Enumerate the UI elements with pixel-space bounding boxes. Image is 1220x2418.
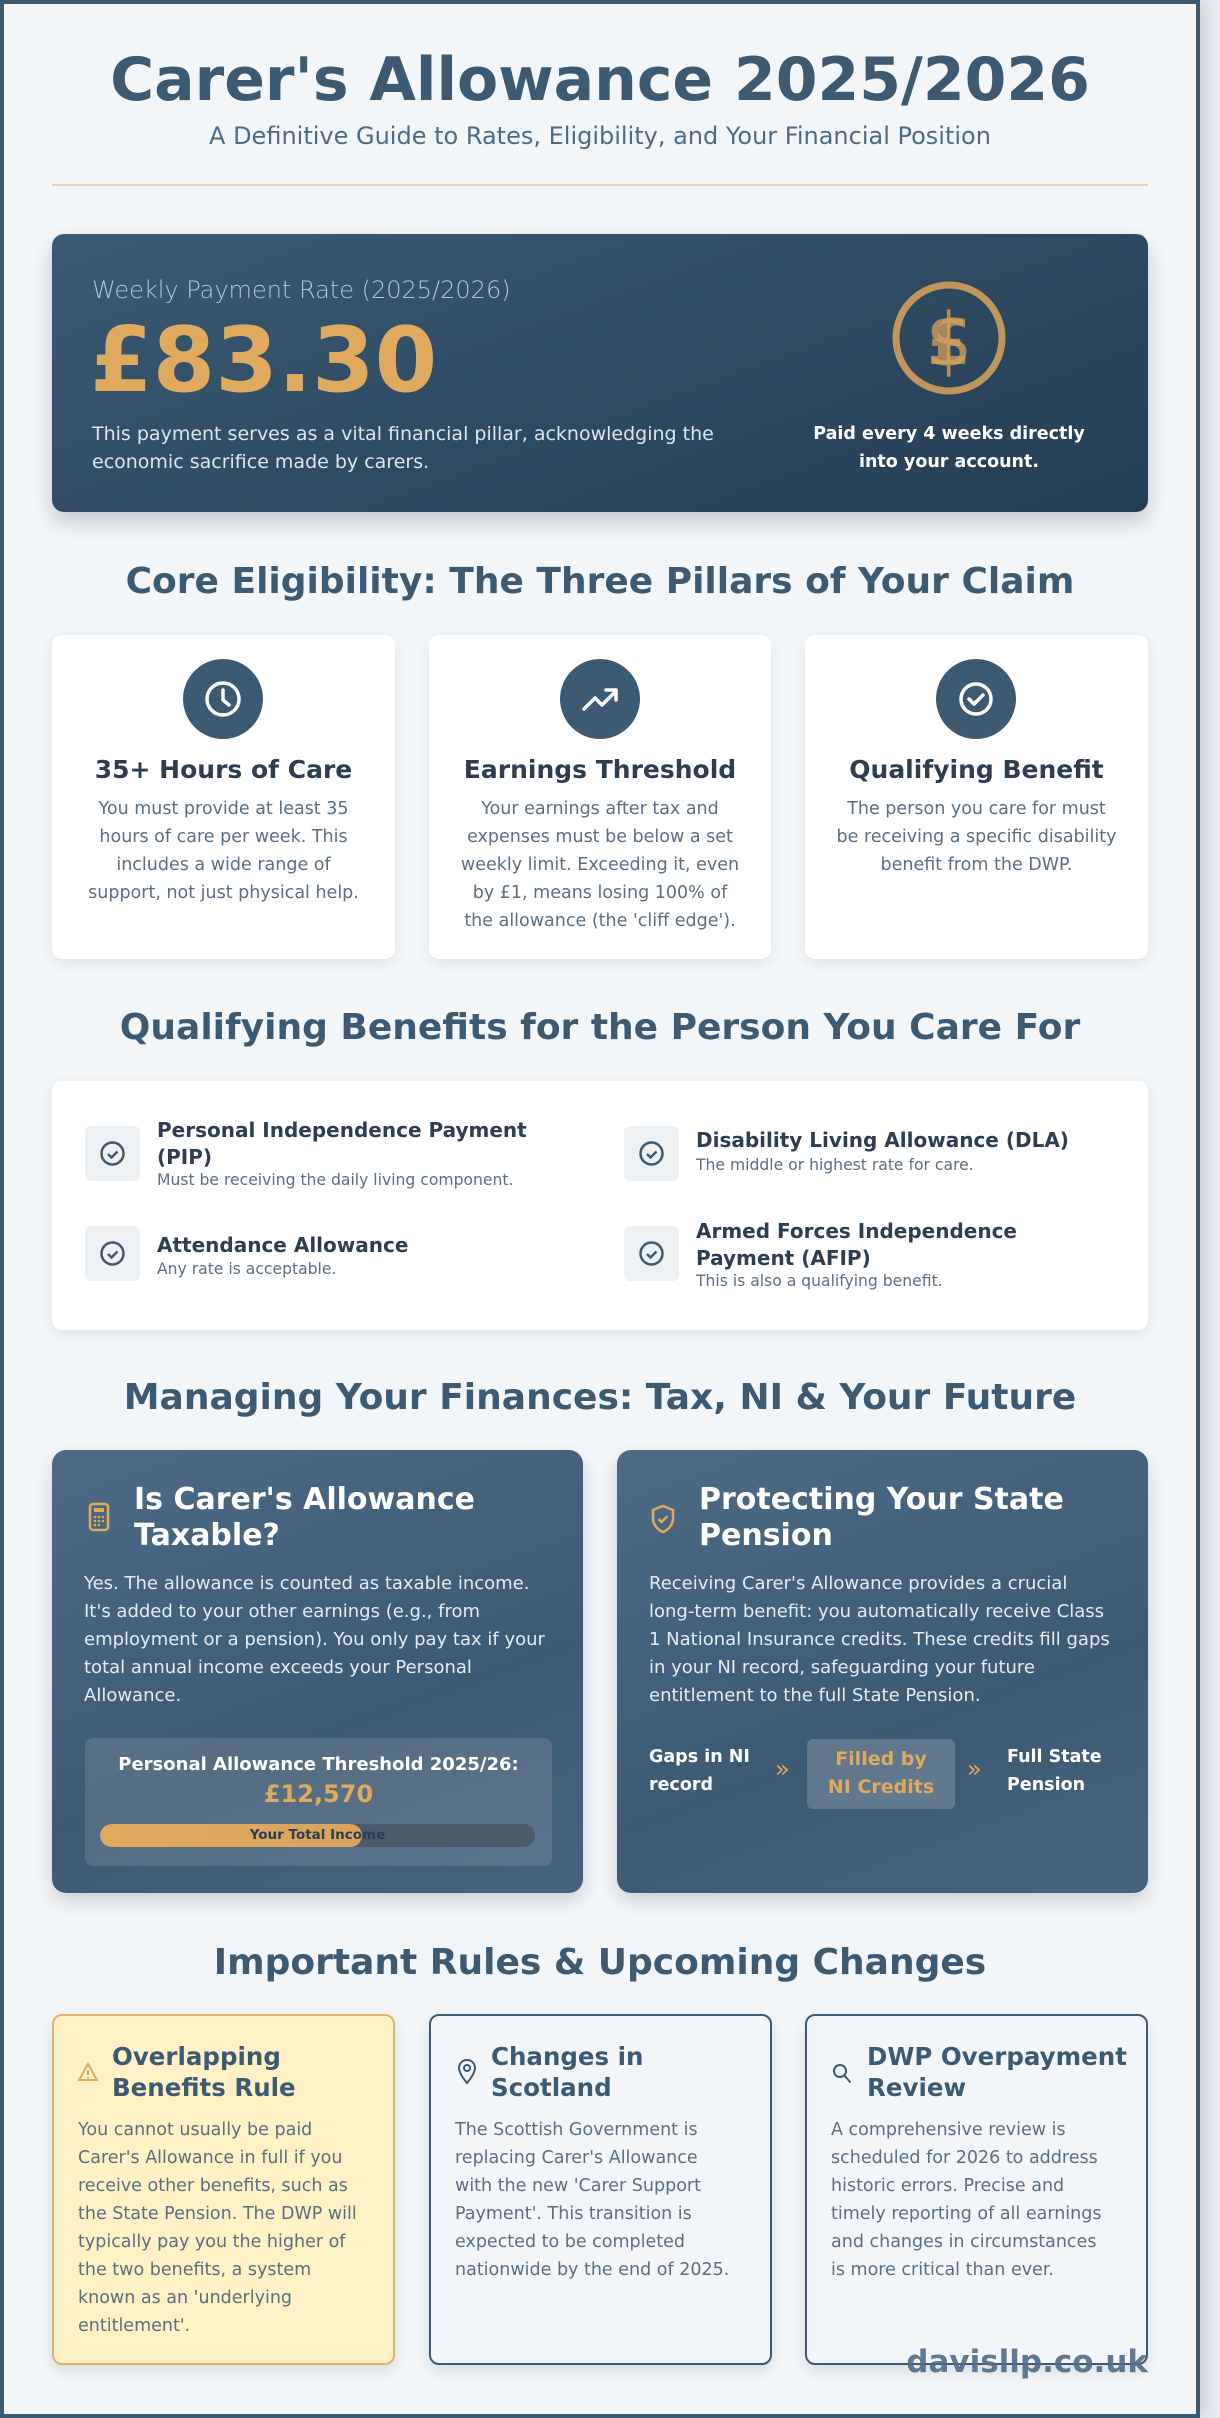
item: AFIP: Armed Forces Independence Payment (AFIP): [696, 1219, 1017, 1270]
subtitle: A Definitive Guide to Rates, Eligibility, and Your Financial Position: [209, 122, 991, 150]
item: Attendance Allowance: Attendance Allowance: [157, 1233, 408, 1257]
threshold box with bar: £12,570: [264, 1780, 373, 1808]
payment note: Paid every 4 weeks directly into your account.: [813, 424, 1085, 472]
card: hours of care: [52, 635, 395, 959]
icon: warning: [78, 2062, 98, 2081]
card: scotland: [429, 2014, 772, 2365]
title: Carer's Allowance 2025/2026: [110, 45, 1090, 115]
description: This payment serves as a vital financial pillar, acknowledging the economic sacrifice made by carers.: [92, 423, 714, 473]
panel: benefits list: [52, 1081, 1148, 1330]
icon: calculator: [88, 1502, 110, 1532]
flow: gaps to pension: NI Credits: [828, 1776, 934, 1798]
flow: gaps to pension: Filled by: [835, 1748, 927, 1770]
item: AFIP: This is also a qualifying benefit.: [696, 1272, 943, 1290]
item: Attendance Allowance: Any rate is acceptable.: [157, 1260, 336, 1278]
heading: qualifying benefits: Qualifying Benefits for the Person You Care For: [120, 1007, 1080, 1048]
icon: pound/dollar coin: $: [925, 298, 973, 384]
icon: check: [936, 659, 1016, 739]
card: qualifying benefit: The person you care for must be receiving a specific disability benefit from the DWP.: [837, 799, 1116, 875]
item: AFIP: [624, 1219, 1017, 1290]
watermark: davisllp.co.uk: [906, 2344, 1148, 2380]
icon: clock: [183, 659, 263, 739]
item: DLA: [624, 1126, 1069, 1181]
card: overlapping benefits: Overlapping Benefits Rule: [112, 2042, 296, 2102]
icon: trend up: [560, 659, 640, 739]
panel: state pension: Receiving Carer's Allowance provides a crucial long-term benefit: you automatically receive Class 1 National Insurance credits. These credits fill gaps in your NI record, safeguarding your future entitlement to the full State Pension.: [649, 1573, 1110, 1706]
panel: taxable: Is Carer's Allowance Taxable?: [134, 1482, 475, 1553]
icon: search: [833, 2064, 852, 2084]
item: DLA: The middle or highest rate for care.: [696, 1156, 974, 1174]
threshold box with bar: Your Total Income: [250, 1827, 385, 1843]
card: hours of care: You must provide at least 35 hours of care per week. This includes a wide range of support, not just physical help.: [88, 799, 359, 903]
card: scotland: Changes in Scotland: [491, 2042, 644, 2102]
threshold box with bar: Personal Allowance Threshold 2025/26:: [118, 1754, 519, 1775]
flow: gaps to pension: [649, 1739, 1102, 1809]
card: DWP review: A comprehensive review is scheduled for 2026 to address historic errors. Precise and timely reporting of all earnings and changes in circumstances is more critical than ever.: [831, 2120, 1101, 2280]
flow: gaps to pension: Gaps in NI record: [649, 1747, 750, 1795]
arrow: »: [967, 1755, 982, 1783]
heading: managing finances: Managing Your Finances: Tax, NI & Your Future: [124, 1377, 1076, 1418]
item: DLA: Disability Living Allowance (DLA): [696, 1128, 1069, 1152]
icon: pound/dollar coin: [892, 282, 1006, 394]
icon: map pin: [458, 2059, 476, 2084]
panel: taxable: [52, 1450, 583, 1893]
card: earnings threshold: Earnings Threshold: [464, 755, 736, 784]
arrow: »: [775, 1755, 790, 1783]
heading: important rules: Important Rules & Upcoming Changes: [214, 1942, 986, 1983]
big rate: £83.30: [90, 308, 437, 413]
hero panel: weekly rate: [52, 234, 1148, 512]
flow: gaps to pension: Full State Pension: [1007, 1747, 1102, 1795]
panel: state pension: Protecting Your State Pension: [699, 1482, 1064, 1553]
item: Attendance Allowance: [85, 1226, 408, 1281]
icon: shield check: [652, 1504, 674, 1534]
item: PIP: Must be receiving the daily living component.: [157, 1171, 513, 1189]
card: DWP review: [805, 2014, 1148, 2365]
threshold box with bar: [85, 1738, 552, 1866]
heading: core eligibility: Core Eligibility: The Three Pillars of Your Claim: [126, 561, 1074, 602]
item: PIP: Personal Independence Payment (PIP): [157, 1118, 527, 1169]
panel: taxable: Yes. The allowance is counted as taxable income. It's added to your other earnings (e.g., from employment or a pension). You only pay tax if your total annual income exceeds your Personal Allowance.: [84, 1573, 545, 1706]
card: overlapping benefits: [52, 2014, 395, 2365]
card: earnings threshold: [429, 635, 771, 959]
card: qualifying benefit: [805, 635, 1148, 959]
item: PIP: [85, 1118, 527, 1189]
card: qualifying benefit: Qualifying Benefit: [849, 755, 1104, 784]
card: earnings threshold: Your earnings after tax and expenses must be below a set weekly limit. Exceeding it, even by £1, means losing 100% of the allowance (the 'cliff edge').: [461, 799, 739, 931]
card: DWP review: DWP Overpayment Review: [867, 2042, 1127, 2102]
label: Weekly Payment Rate (2025/2026): [92, 276, 511, 304]
card: scotland: The Scottish Government is replacing Carer's Allowance with the new 'Carer Support Payment'. This transition is expected to be completed nationwide by the end of 2025.: [455, 2120, 729, 2280]
card: overlapping benefits: You cannot usually be paid Carer's Allowance in full if you receive other benefits, such as the State Pension. The DWP will typically pay you the higher of the two benefits, a system known as an 'underlying entitlement'.: [78, 2120, 357, 2336]
icon: pound/dollar coin: £: [927, 306, 971, 379]
card: hours of care: 35+ Hours of Care: [95, 755, 352, 784]
panel: state pension: [617, 1450, 1148, 1893]
